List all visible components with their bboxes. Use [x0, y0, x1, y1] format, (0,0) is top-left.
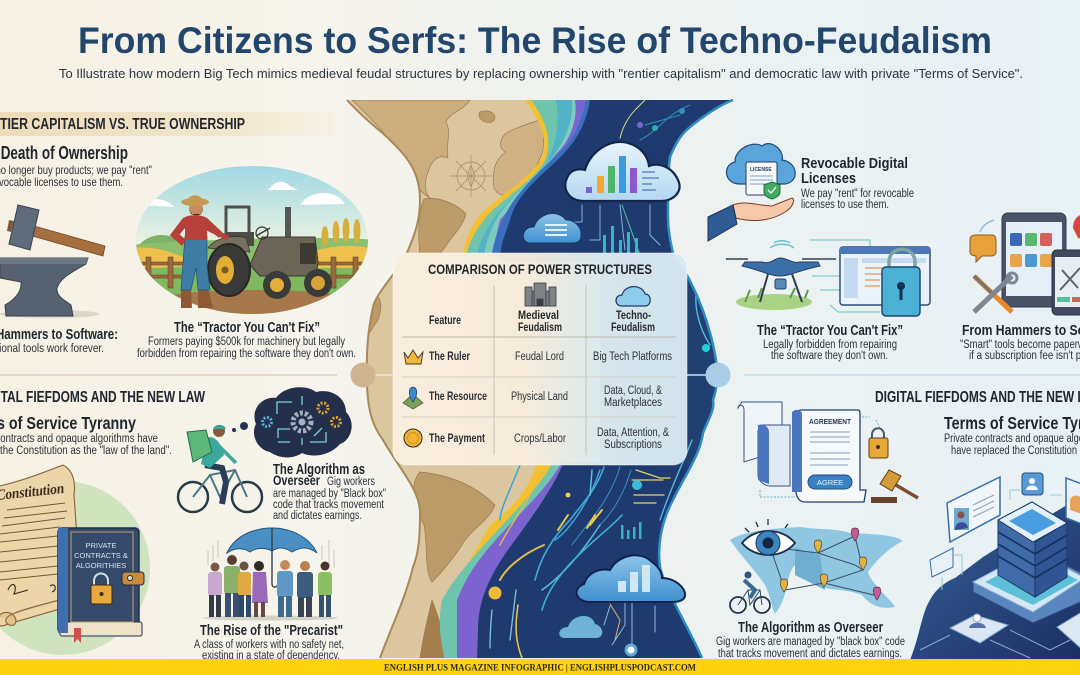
row: the resource [429, 385, 662, 409]
text: rise of the precarist: existing in a state of dependency. [202, 650, 340, 662]
title: From Citizens to Serfs: The Rise of Techno-Feudalism [78, 19, 992, 61]
text: tractor you can't fix left: Formers paying $500k for machinery but legally [148, 336, 345, 348]
text: tractor you can't fix left [137, 320, 356, 360]
color stripes upper [464, 100, 548, 253]
illustration: constitution and private contracts book [0, 465, 150, 655]
icon: algorithm thought cloud [254, 387, 352, 457]
text: tractor you can't fix right: Legally forbidden from repairing [763, 339, 897, 351]
column heads: Feudalism [611, 322, 655, 334]
text: revocable digital licenses: We pay "rent" for revocable [801, 188, 914, 200]
illustration: drone with locked browser [726, 240, 930, 316]
column heads: Techno- [616, 310, 651, 322]
compass rose [450, 155, 492, 197]
text: terms of service left [0, 413, 172, 457]
column heads: Feature [429, 315, 461, 327]
text: algorithm as overseer right: that tracks movement and dictates earnings. [718, 648, 902, 660]
central map-to-digital band [340, 95, 750, 665]
row: the ruler: Feudal Lord [515, 351, 564, 363]
text: tractor you can't fix left: The “Tractor You Can't Fix” [174, 320, 320, 336]
text: algorithm as overseer left [273, 462, 386, 522]
illustration: farmer and tractor [136, 166, 368, 314]
illustration: constitution and private contracts book: ALGORITHIES [76, 561, 126, 570]
column heads: Medieval [518, 310, 559, 322]
text: algorithm as overseer left: Overseer [273, 473, 321, 488]
row: the resource: Marketplaces [604, 397, 662, 409]
text: tractor you can't fix left: forbidden from repairing the software they don't own. [137, 348, 356, 360]
text: algorithm as overseer left: and dictates earnings. [273, 510, 362, 522]
table title: COMPARISON OF POWER STRUCTURES [428, 262, 652, 277]
text: algorithm as overseer right: Gig workers are managed by "black box" code [716, 636, 905, 648]
text: from hammers to software right [960, 323, 1080, 362]
left banner: rentier capitalism [0, 112, 335, 136]
icon: hammer and anvil [0, 205, 105, 318]
text: revocable digital licenses [801, 156, 914, 211]
circuit lines and data streaks [490, 100, 710, 658]
row: the payment [429, 427, 669, 451]
icon: thought dots [232, 422, 248, 432]
icon: small server cloud [523, 214, 581, 243]
row: the payment: Data, Attention, & [597, 427, 669, 439]
illustration: agreement, lock and gavel: AGREEMENT [809, 419, 852, 426]
icon: map pin [403, 387, 423, 409]
footer bar [0, 659, 1080, 675]
old map continents [352, 100, 545, 658]
text: tractor you can't fix right: the software they don't own. [771, 350, 888, 362]
color stripes lower [470, 465, 552, 560]
icon: license cloud in hand: LICENSE [750, 167, 772, 173]
icon: small lower cloud [559, 616, 602, 638]
illustration: constitution and private contracts book: CONTRACTS & [74, 551, 128, 560]
text: rise of the precarist [194, 623, 344, 662]
footer bar: ENGLISH PLUS MAGAZINE INFOGRAPHIC | ENGLISHPLUSPODCAST.COM [384, 664, 696, 674]
row: the ruler: The Ruler [429, 351, 470, 363]
text: death of ownership [0, 143, 152, 189]
text: algorithm as overseer left: code that tracks movement [273, 499, 385, 511]
illustration: agreement, lock and gavel [738, 402, 918, 503]
illustration: constitution and private contracts book: PRIVATE [86, 541, 116, 550]
illustration: agreement, lock and gavel: AGREE [817, 478, 843, 487]
icon: crown [404, 350, 423, 364]
comparison table card [393, 253, 687, 465]
icon: table cloud [616, 287, 650, 306]
text: tractor you can't fix right [757, 323, 903, 362]
text: revocable digital licenses: Licenses [801, 171, 856, 187]
text: rise of the precarist: A class of workers with no safety net, [194, 639, 344, 651]
icon: coin [404, 429, 422, 447]
text: algorithm as overseer right: The Algorithm as Overseer [738, 620, 883, 636]
band outline [347, 100, 733, 658]
icon: license cloud in hand [708, 144, 795, 241]
text: algorithm as overseer left: Gig workers [327, 476, 375, 488]
row: the payment: The Payment [429, 433, 485, 445]
text: terms of service right [944, 413, 1080, 457]
row: the payment: Crops/Labor [514, 433, 566, 445]
column heads [429, 310, 655, 334]
row: the ruler: Big Tech Platforms [593, 351, 672, 363]
divider nodes [0, 362, 1080, 388]
row: the ruler [429, 351, 672, 363]
text: revocable digital licenses: licenses to use them. [801, 199, 889, 211]
illustration: data server and user cards [910, 473, 1080, 660]
illustration: surveillance eye over world map [730, 519, 903, 614]
text: algorithm as overseer left: The Algorithm as [273, 462, 365, 478]
row: the payment: Subscriptions [604, 439, 662, 451]
icon: equalizer cloud [577, 555, 685, 602]
illustration: delivery cyclist [178, 425, 262, 512]
row: the resource: Data, Cloud, & [604, 385, 662, 397]
text: algorithm as overseer right [716, 620, 905, 660]
row: the resource: Physical Land [511, 391, 568, 403]
icon: castle [525, 283, 556, 306]
text: from hammers to software left [0, 327, 118, 355]
icon: bar chart cloud [565, 142, 679, 201]
text: rise of the precarist: The Rise of the "Precarist" [200, 623, 343, 639]
tractor [208, 207, 332, 299]
text: algorithm as overseer left: are managed by "Black box" [273, 488, 386, 500]
column heads: Feudalism [518, 322, 562, 334]
farmer [170, 195, 228, 308]
illustration: precarist workers under umbrella [202, 528, 338, 620]
illustration: tablet, phone and tools [970, 213, 1080, 315]
text: revocable digital licenses: Revocable Digital [801, 156, 908, 172]
row: the resource: The Resource [429, 391, 487, 403]
text: tractor you can't fix right: The “Tractor You Can't Fix” [757, 323, 903, 339]
subtitle: To Illustrate how modern Big Tech mimics medieval feudal structures by replacing ownership with "rentier capitalism" and democratic law with private "Terms of Service". [59, 66, 1023, 81]
